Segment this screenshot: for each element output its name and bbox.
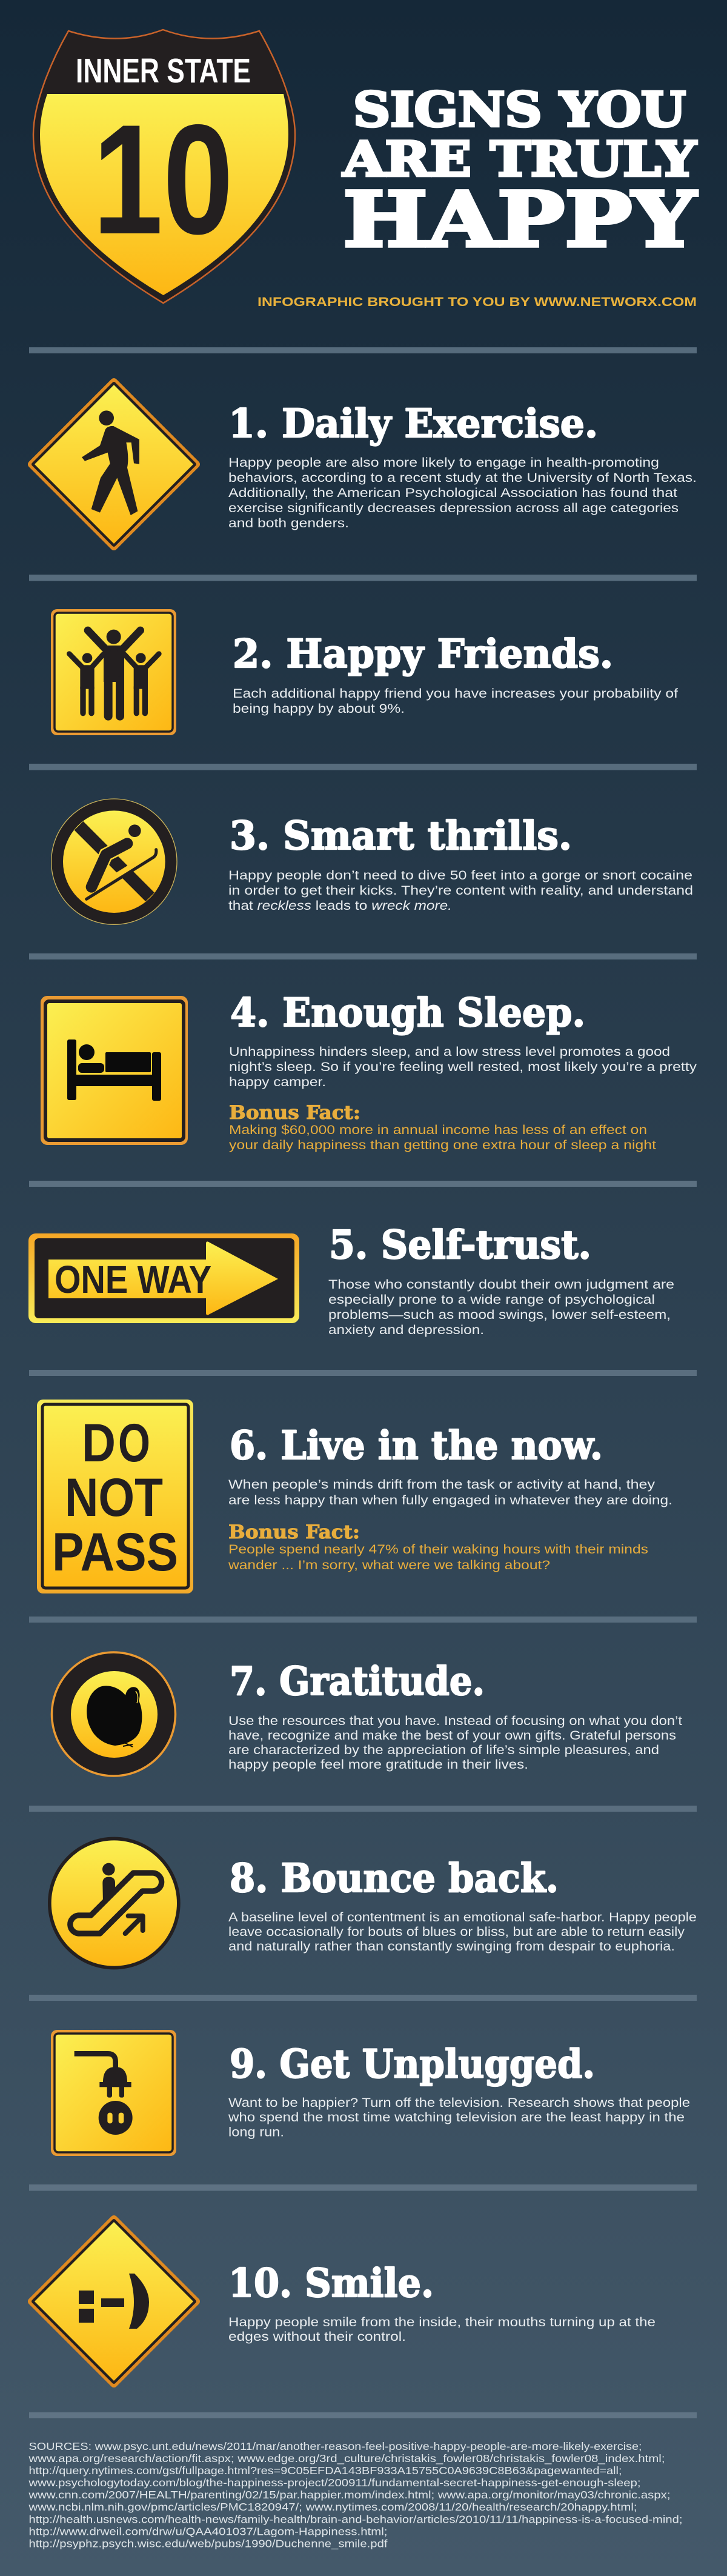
heading: 4. Enough Sleep. — [230, 990, 585, 1036]
icon: do not pass sign: D — [82, 1412, 116, 1473]
text block: are less happy than when fully engaged in whatever they are doing. — [228, 1493, 672, 1507]
text block: exercise significantly decreases depression across all age categories — [228, 501, 679, 515]
panel: 3 smart thrills — [51, 799, 693, 924]
icon: do not pass sign: NOT — [65, 1467, 163, 1527]
icon: do not pass sign: PASS — [52, 1521, 178, 1582]
icon: do not pass sign: O — [118, 1412, 150, 1473]
sources: http://health.usnews.com/health-news/family-health/brain-and-behavior/articles/2010/11/11/happiness-is-a-focused-mind; — [29, 2513, 682, 2525]
text block: and both genders. — [228, 516, 349, 530]
heading: 9. Get Unplugged. — [230, 2041, 595, 2087]
bonus fact: Bonus Fact: — [228, 1521, 360, 1543]
panel: 8 bounce back — [48, 1837, 697, 1969]
bonus fact: wander ... I’m sorry, what were we talking about? — [228, 1558, 550, 1572]
panel: 2 happy friends — [51, 609, 678, 735]
heading: 8. Bounce back. — [230, 1855, 559, 1901]
title — [342, 82, 697, 264]
text block: are characterized by the appreciation of life’s simple pleasures, and — [228, 1743, 659, 1757]
text block — [228, 456, 697, 530]
text block — [233, 687, 678, 716]
tagline: INFOGRAPHIC BROUGHT TO YOU BY WWW.NETWORX.COM — [257, 295, 697, 309]
sources: www.apa.org/research/action/fit.aspx; www.edge.org/3rd_culture/christakis_fowler08/christakis_fowler08_index.html; — [28, 2452, 665, 2465]
icon: smiley diamond sign — [32, 2219, 196, 2384]
icon: turkey circle sign — [52, 1652, 176, 1776]
heading: 1. Daily Exercise. — [228, 401, 598, 447]
icon: no skiing circle sign — [51, 799, 177, 924]
text block — [228, 2096, 690, 2140]
text block: that reckless leads to wreck more. — [228, 899, 452, 913]
panel: 7 gratitude — [52, 1652, 682, 1776]
bonus fact: your daily happiness than getting one extra hour of sleep a night — [229, 1138, 656, 1152]
heading: 7. Gratitude. — [230, 1658, 485, 1704]
heading: 10. Smile. — [228, 2260, 434, 2306]
bonus fact — [229, 1102, 656, 1152]
text block: Each additional happy friend you have increases your probability of — [233, 687, 678, 701]
text block: A baseline level of contentment is an emotional safe-harbor. Happy people — [228, 1910, 697, 1924]
text block — [228, 869, 693, 913]
text block: Happy people smile from the inside, their mouths turning up at the — [228, 2315, 656, 2329]
text block: When people’s minds drift from the task or activity at hand, they — [228, 1478, 656, 1492]
text block: Happy people don’t need to dive 50 feet into a gorge or snort cocaine — [228, 869, 692, 883]
text block: Use the resources that you have. Instead of focusing on what you don’t — [228, 1714, 682, 1728]
text block: anxiety and depression. — [328, 1323, 484, 1337]
text block: behaviors, according to a recent study at the University of North Texas. — [228, 471, 697, 485]
icon: one way sign: ONE WAY — [55, 1258, 211, 1301]
text block — [328, 1278, 674, 1337]
panel: 10 smile — [32, 2219, 656, 2384]
title: SIGNS YOU — [353, 82, 686, 138]
text block: especially prone to a wide range of psychological — [328, 1293, 655, 1307]
title: HAPPY — [343, 176, 697, 264]
bonus fact — [228, 1521, 648, 1572]
icon: friends square sign — [51, 609, 176, 735]
panel: 5 self-trust — [28, 1222, 674, 1337]
text block: Additionally, the American Psychological Association has found that — [228, 486, 677, 500]
heading: 2. Happy Friends. — [233, 631, 613, 677]
text block: night’s sleep. So if you’re feeling well rested, most likely you’re a pretty — [229, 1060, 697, 1074]
text block — [229, 1045, 697, 1089]
icon: plug square sign — [51, 2030, 176, 2156]
title: ARE TRULY — [342, 131, 697, 187]
text block: and naturally rather than constantly swinging from despair to euphoria. — [228, 1940, 675, 1954]
text block: leave occasionally for bouts of blues or bliss, but are able to return easily — [228, 1925, 685, 1939]
icon: bed square sign — [41, 996, 188, 1145]
icon: pedestrian diamond sign — [32, 382, 196, 547]
sources: www.psychologytoday.com/blog/the-happiness-project/200911/fundamental-secret-happiness-get-enough-sleep; — [28, 2477, 640, 2489]
text block: happy people feel more gratitude in their lives. — [228, 1758, 528, 1772]
icon: one way sign — [28, 1233, 299, 1323]
sources: http://psyphz.psych.wisc.edu/web/pubs/1990/Duchenne_smile.pdf — [29, 2537, 388, 2551]
text block: happy camper. — [229, 1075, 326, 1089]
text block: problems—such as mood swings, lower self-esteem, — [328, 1308, 671, 1322]
panel: 4 enough sleep — [41, 990, 697, 1152]
text block: in order to get their kicks. They’re content with reality, and understand — [228, 884, 693, 898]
sources: http://query.nytimes.com/gst/fullpage.html?res=9C05EFDA143BF933A15755C0A9639C8B63&pagewanted=all; — [29, 2464, 622, 2477]
heading: 3. Smart thrills. — [230, 813, 572, 859]
text block: Those who constantly doubt their own judgment are — [328, 1278, 674, 1292]
text block: Unhappiness hinders sleep, and a low stress level promotes a good — [229, 1045, 670, 1059]
icon: do not pass sign — [37, 1400, 193, 1593]
text block — [228, 1714, 682, 1772]
sources: SOURCES: www.psyc.unt.edu/news/2011/mar/another-reason-feel-positive-happy-people-are-more-likely-exercise; — [29, 2440, 642, 2452]
text block — [228, 1910, 697, 1954]
text block: who spend the most time watching television are the least happy in the — [228, 2111, 685, 2124]
sources: www.cnn.com/2007/HEALTH/parenting/02/15/par.happier.mom/index.html; www.apa.org/monitor/may03/chronic.aspx; — [28, 2489, 671, 2501]
text block: being happy by about 9%. — [233, 702, 405, 716]
icon: inner state 10 shield: INNER STATE — [76, 52, 251, 90]
bonus fact: Bonus Fact: — [229, 1102, 360, 1124]
bonus fact: Making $60,000 more in annual income has less of an effect on — [229, 1123, 647, 1137]
text block — [228, 2315, 656, 2344]
sources — [28, 2440, 683, 2551]
text block: edges without their control. — [228, 2330, 406, 2344]
sources: http://www.drweil.com/drw/u/QAA401037/Lagom-Happiness.html; — [29, 2525, 388, 2537]
text block: have, recognize and make the best of your own gifts. Grateful persons — [228, 1729, 676, 1743]
bonus fact: People spend nearly 47% of their waking hours with their minds — [228, 1543, 648, 1557]
text block: Happy people are also more likely to engage in health-promoting — [228, 456, 659, 470]
panel: 1 daily exercise — [32, 382, 697, 547]
text block: long run. — [228, 2125, 284, 2140]
text block — [228, 1478, 672, 1507]
header — [33, 30, 697, 309]
sources: www.ncbi.nlm.nih.gov/pmc/articles/PMC1820947/; www.nytimes.com/2008/11/20/health/research/20happy.html; — [28, 2501, 637, 2513]
panel: 6 live in the now — [37, 1400, 672, 1593]
text block: Want to be happier? Turn off the television. Research shows that people — [228, 2096, 690, 2110]
icon: inner state 10 shield — [33, 30, 295, 303]
heading: 6. Live in the now. — [230, 1423, 603, 1469]
icon: escalator circle sign — [48, 1837, 181, 1969]
panel: 9 get unplugged — [51, 2030, 690, 2156]
heading: 5. Self-trust. — [329, 1222, 591, 1268]
icon: inner state 10 shield: 10 — [93, 92, 233, 267]
